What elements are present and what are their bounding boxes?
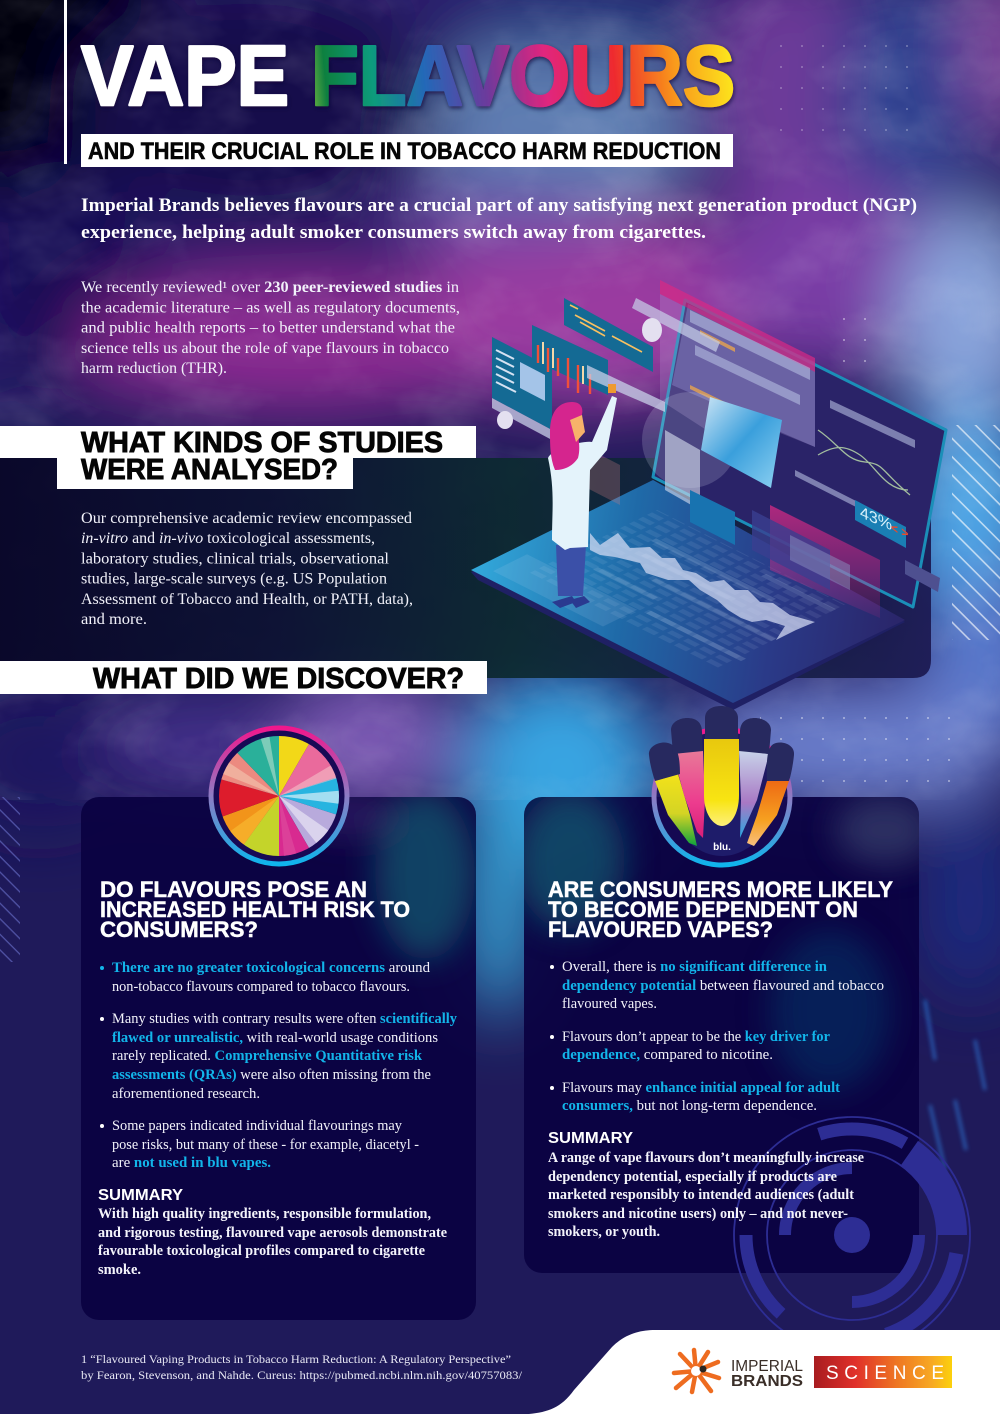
heading: DO FLAVOURS POSE AN — [100, 877, 367, 902]
decoration: concentric circles — [734, 1117, 970, 1353]
title: VAPE — [81, 29, 289, 124]
dot grid decorations — [760, 40, 950, 790]
hatch decoration left — [0, 797, 20, 962]
intro statement — [81, 195, 917, 243]
DNA strand — [818, 430, 910, 495]
heading: TO BECOME DEPENDENT ON — [548, 897, 858, 922]
bullets: Overall, there is no significant difference in — [562, 959, 827, 975]
studies paragraph — [81, 510, 413, 628]
hatch decoration right — [952, 425, 1000, 640]
summary: favourable toxicological profiles compared to cigarette — [98, 1243, 426, 1259]
glass data sheet — [642, 392, 782, 488]
43 percent label — [855, 500, 908, 548]
studies paragraph: in-vitro and in-vivo toxicological assessments, — [81, 530, 375, 547]
bullets: There are no greater toxicological concerns around — [112, 960, 431, 976]
bullets: consumers, but not long-term dependence. — [562, 1098, 817, 1114]
summary: smokers, or youth. — [548, 1224, 660, 1240]
bullets: pose risks, but many of these - for example, diacetyl - — [112, 1137, 419, 1153]
laptop screen — [653, 280, 946, 618]
logo: Science — [814, 1356, 952, 1388]
bullets: aforementioned research. — [112, 1086, 260, 1102]
blue streaks right — [925, 1000, 985, 1170]
footnote: 1 “Flavoured Vaping Products in Tobacco Harm Reduction: A Regulatory Perspective” — [81, 1352, 511, 1366]
panel: dark band behind studies section — [0, 458, 931, 678]
review paragraph: We recently reviewed¹ over 230 peer-reviewed studies in — [81, 279, 459, 296]
summary: smokers and nicotine users) only – and not never- — [548, 1206, 848, 1222]
bullets — [550, 959, 884, 1114]
studies paragraph: Our comprehensive academic review encompassed — [81, 510, 412, 527]
bullets: flavoured vapes. — [562, 996, 657, 1012]
logo: Imperial Brands — [674, 1350, 803, 1392]
studies paragraph: studies, large-scale surveys (e.g. US Population — [81, 570, 387, 588]
smoke texture overlay — [0, 0, 1000, 800]
bullets: Many studies with contrary results were often scientifically — [112, 1011, 458, 1027]
vertical title rule — [64, 0, 67, 164]
icon: vape devices — [649, 706, 794, 865]
summary — [548, 1130, 865, 1240]
logo: Imperial Brands: IMPERIAL — [731, 1358, 803, 1375]
heading: what kinds of studies — [0, 426, 476, 489]
studies paragraph: Assessment of Tobacco and Health, or PATH, data), — [81, 591, 413, 608]
heading: what did we discover: WHAT DID WE DISCOVER? — [93, 663, 464, 695]
heading: what kinds of studies: WERE ANALYSED? — [81, 454, 338, 486]
laptop base — [471, 480, 905, 710]
subtitle banner: AND THEIR CRUCIAL ROLE IN TOBACCO HARM REDUCTION — [88, 138, 721, 165]
floating screens — [492, 298, 940, 592]
summary: SUMMARY — [98, 1187, 184, 1204]
bullets — [100, 960, 458, 1171]
heading — [548, 877, 893, 942]
bullets: non-tobacco flavours compared to tobacco flavours. — [112, 979, 410, 995]
bullets: dependence, compared to nicotine. — [562, 1047, 773, 1063]
icon: vape devices: blu. — [713, 842, 731, 853]
review paragraph: the academic literature – as well as regulatory documents, — [81, 300, 460, 316]
bullets: Flavours may enhance initial appeal for adult — [562, 1080, 840, 1096]
review paragraph: harm reduction (THR). — [81, 360, 227, 377]
title: FLAVOURS — [311, 29, 735, 124]
footer white shape — [529, 1330, 1000, 1414]
bullets: rarely replicated. Comprehensive Quantitative risk — [112, 1048, 423, 1064]
intro statement: Imperial Brands believes flavours are a crucial part of any satisfying next generation product (NGP) — [81, 195, 917, 216]
logo: Imperial Brands: BRANDS — [731, 1373, 803, 1390]
footnote — [81, 1352, 523, 1382]
panel: health risk — [81, 790, 476, 1320]
summary — [98, 1187, 448, 1278]
summary: A range of vape flavours don’t meaningfully increase — [548, 1150, 865, 1166]
studies paragraph: and more. — [81, 611, 147, 628]
intro statement: experience, helping adult smoker consumers switch away from cigarettes. — [81, 222, 706, 243]
heading: CONSUMERS? — [100, 917, 258, 942]
scientist — [548, 384, 617, 608]
audio waveform — [590, 533, 815, 640]
bullets: Flavours don’t appear to be the key driver for — [562, 1029, 831, 1045]
logo: Science: SCIENCE — [826, 1363, 944, 1384]
bullets: Some papers indicated individual flavourings may — [112, 1118, 403, 1134]
heading — [100, 877, 410, 942]
heading: ARE CONSUMERS MORE LIKELY — [548, 877, 893, 902]
43 percent label: < > — [891, 520, 908, 541]
43 percent label: 43% — [860, 503, 892, 534]
summary: With high quality ingredients, responsible formulation, — [98, 1206, 431, 1222]
review paragraph: and public health reports – to better understand what the — [81, 320, 455, 336]
icon: colour wheel — [211, 726, 348, 868]
review paragraph — [81, 279, 460, 377]
heading: what kinds of studies: WHAT KINDS OF STUDIES — [81, 427, 443, 459]
summary: dependency potential, especially if products are — [548, 1169, 838, 1185]
laptop illustration with scientist — [471, 280, 946, 710]
panel: dependency — [515, 790, 970, 1353]
studies paragraph: laboratory studies, clinical trials, observational — [81, 550, 389, 568]
heading: INCREASED HEALTH RISK TO — [100, 897, 410, 922]
bullets: are not used in blu vapes. — [112, 1155, 271, 1171]
review paragraph: science tells us about the role of vape flavours in tobacco — [81, 340, 449, 357]
bullets: assessments (QRAs) were also often missing from the — [112, 1067, 431, 1083]
summary: SUMMARY — [548, 1130, 634, 1147]
footnote: by Fearon, Stevenson, and Nahde. Cureus: https://pubmed.ncbi.nlm.nih.gov/40757083/ — [81, 1368, 523, 1382]
summary: smoke. — [98, 1262, 141, 1278]
title — [81, 29, 735, 124]
summary: marketed responsibly to intended audiences (adult — [548, 1187, 854, 1203]
summary: and rigorous testing, flavoured vape aerosols demonstrate — [98, 1225, 448, 1241]
bullets: dependency potential between flavoured and tobacco — [562, 978, 884, 994]
bullets: flawed or unrealistic, with real-world usage conditions — [112, 1030, 438, 1046]
heading: FLAVOURED VAPES? — [548, 917, 773, 942]
